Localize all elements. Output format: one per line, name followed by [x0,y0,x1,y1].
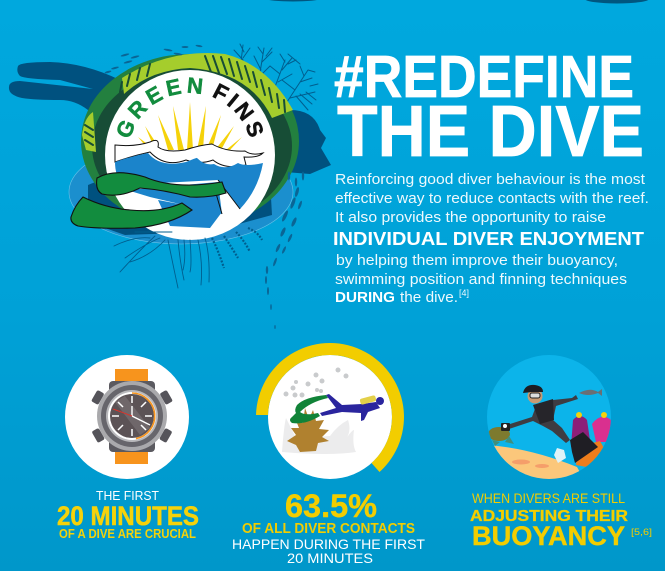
roots below logo [114,232,209,288]
intro paragraph: the dive. [400,290,458,306]
intro paragraph: effective way to reduce contacts with the reef. [335,191,649,207]
title line 1: #REDEFINE [334,44,634,110]
caption: BUOYANCY [472,521,625,551]
intro paragraph: It also provides the opportunity to raise [335,210,606,226]
white circle [65,355,189,479]
lower water bands [127,180,240,228]
white circle [268,355,392,479]
intro paragraph: by helping them improve their buoyancy, [336,253,618,269]
icon: purple and pink corals [571,416,591,447]
caption [470,491,652,551]
intro paragraph: INDIVIDUAL DIVER ENJOYMENT [333,229,644,249]
intro paragraph: Reinforcing good diver behaviour is the most [335,172,645,188]
logo text FINS: FINS [212,83,263,137]
icon: dive watch [91,369,173,464]
icon: bubbles [554,448,566,463]
title [334,44,644,172]
intro paragraph: DURING [335,290,395,306]
top edge shapes [267,0,649,4]
outer green ring [81,54,299,228]
sun rays [138,102,242,150]
stat caption: 20 MINUTES [287,550,373,566]
panel: 20 minutes watch [57,355,199,541]
seaweed fronds below logo [212,228,262,268]
intro paragraph: [4] [459,288,469,298]
breaking wave [115,140,263,167]
caption: WHEN DIVERS ARE STILL [472,491,625,506]
scene circle [487,355,612,490]
caption: OF A DIVE ARE CRUCIAL [59,526,196,541]
caption: ADJUSTING THEIR [470,508,628,525]
fish school [104,44,304,329]
icon: fish [579,389,602,396]
stat caption [232,488,425,566]
panel: adjusting buoyancy [470,355,652,551]
lime reef top arc [122,53,293,118]
intro paragraph: swimming position and finning techniques [335,272,627,288]
panel: 63.5% of contacts [232,343,425,566]
water [115,153,263,209]
donut arc 63.5% [256,343,404,472]
stat caption: OF ALL DIVER CONTACTS [242,521,415,537]
icon: turtle [488,427,510,441]
icon: sand [494,446,580,479]
logo: Green Fins emblem with diver silhouette and reef [8,44,331,329]
icon: orange coral [576,441,604,467]
intro paragraph [333,172,649,306]
icon: ghost coral [282,418,356,454]
diver silhouette head [285,110,331,174]
upper green fin [97,173,226,197]
stat caption: HAPPEN DURING THE FIRST [232,536,425,552]
caption: [5,6] [631,527,652,537]
lower green fin [71,197,192,228]
logo text GREEN: GREEN [117,77,202,137]
caption: 20 MINUTES [57,501,199,531]
diver silhouette fins and legs [9,62,135,130]
title line 2: THE DIVE [337,92,644,172]
icon: bubbles [284,368,348,398]
white circle [105,70,275,240]
dark green inner band [92,68,292,224]
stat caption: 63.5% [285,488,377,524]
blue ellipse behind logo [69,140,293,244]
coral branches [232,44,318,110]
dark reef behind logo [88,170,272,235]
lime reef left patch [82,112,96,152]
seaweed texture on ring [85,56,285,145]
icon: diver [290,394,384,423]
icon: photographer diver [501,385,598,463]
icon: brown coral [287,408,329,452]
caption [57,488,199,541]
caption: THE FIRST [96,488,159,503]
